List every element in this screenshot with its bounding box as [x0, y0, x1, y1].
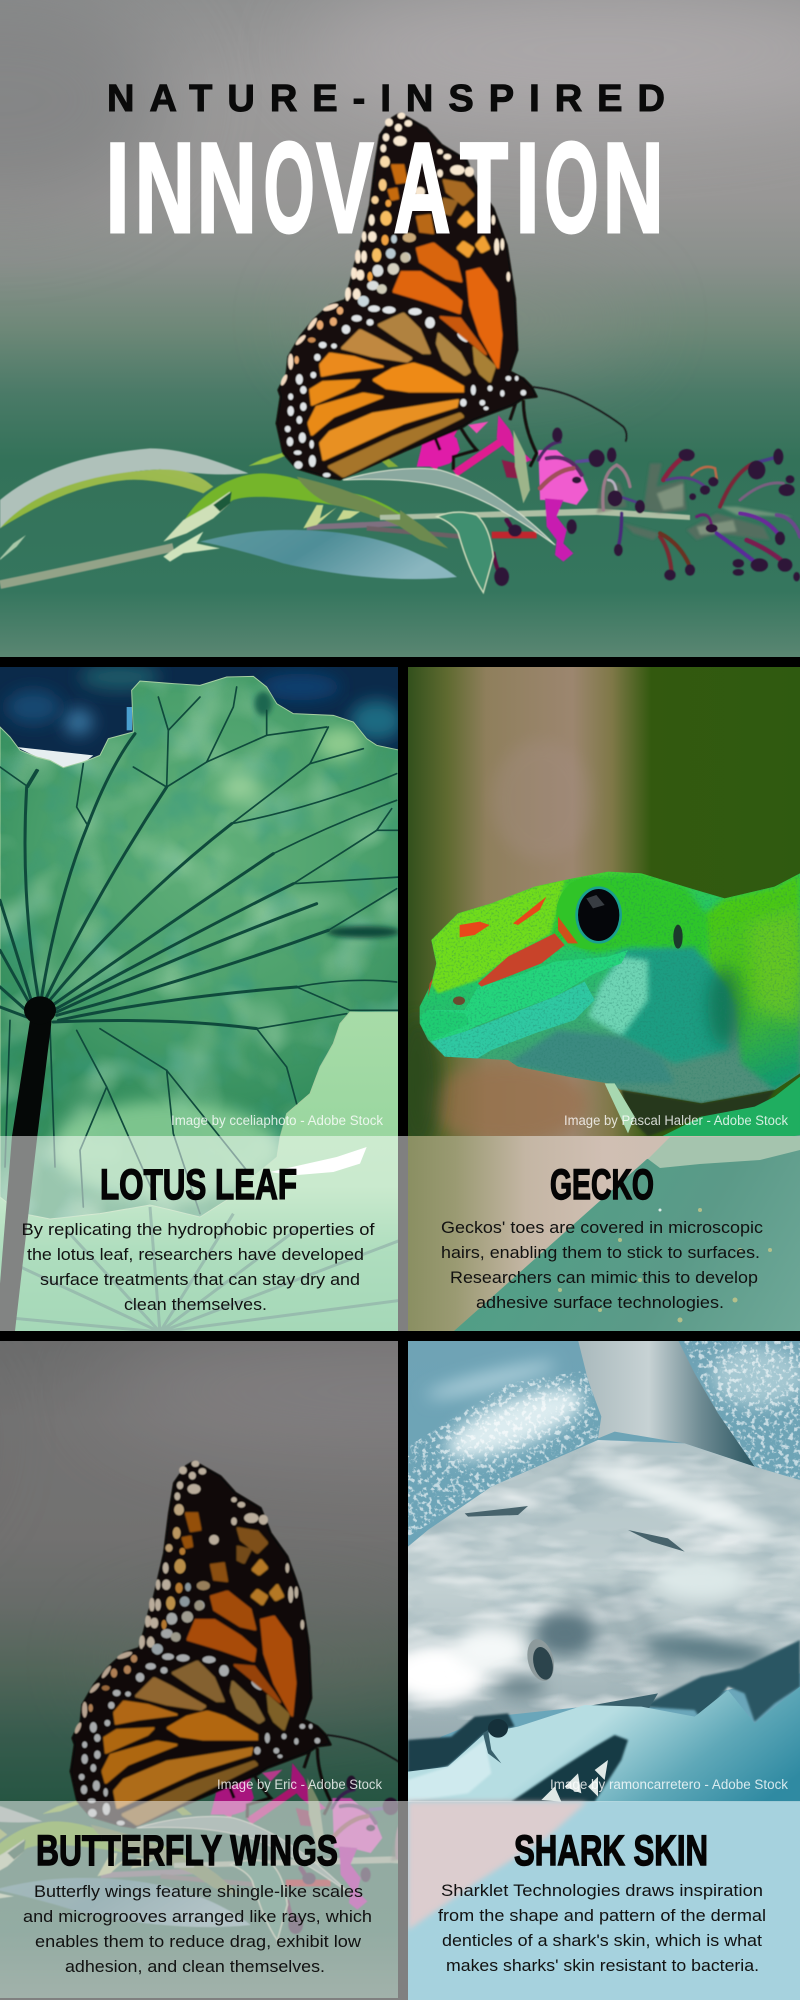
text: shark skin — [438, 1881, 766, 1975]
text: shark skin: Sharklet Technologies draws inspiration — [441, 1881, 763, 1900]
shark mouth — [511, 1735, 628, 1802]
text: gecko: adhesive surface technologies. — [476, 1293, 724, 1312]
caption band: butterfly and shark — [0, 1801, 800, 2000]
gecko body — [420, 872, 800, 1103]
title: letters A and T in front of butterfly: T — [460, 117, 508, 260]
text: butterfly wings: and microgrooves arranged like rays, which — [23, 1907, 372, 1926]
plant: leaves and stems — [0, 448, 457, 585]
text: shark skin: makes sharks' skin resistant to bacteria. — [446, 1956, 759, 1975]
text: butterfly wings — [23, 1882, 372, 1976]
gecko background — [408, 667, 800, 1136]
heading: shark skin: SHARK SKIN — [514, 1827, 708, 1875]
title: INNOVATION (V sits behind the butterfly): O — [544, 117, 598, 260]
dorsal fin — [578, 1340, 755, 1467]
text: butterfly wings: Butterfly wings feature shingle-like scales — [34, 1882, 363, 1901]
gecko front leg — [662, 1076, 800, 1136]
body light and shade — [388, 1433, 800, 1720]
gecko toes — [648, 1136, 800, 1168]
shark eye — [523, 1636, 558, 1684]
leaf surface — [454, 1135, 800, 1331]
hindwing spots — [285, 249, 526, 477]
credit: lotus: Image by cceliaphoto - Adobe Stock — [171, 1113, 383, 1128]
water foam — [438, 1374, 591, 1472]
panel: butterfly wings photo — [0, 1321, 694, 2000]
title: INNOVATION (V sits behind the butterfly): N — [197, 117, 257, 260]
title: INNOVATION (V sits behind the butterfly): A — [394, 117, 450, 260]
shark photo — [388, 1340, 800, 2000]
upper lip — [420, 950, 628, 1042]
title: INNOVATION (V sits behind the butterfly): O — [264, 117, 315, 260]
panel: shark — [388, 1340, 800, 2000]
hindwing margin highlights — [279, 250, 381, 386]
title: NATURE-INSPIRED: NATURE-INSPIRED — [107, 78, 665, 120]
title: INNOVATION (V sits behind the butterfly): V — [316, 117, 374, 260]
text: butterfly wings: enables them to reduce drag, exhibit low — [35, 1932, 362, 1951]
lower lip — [431, 982, 595, 1060]
text: gecko — [441, 1218, 764, 1312]
caption band: lotus and gap — [0, 1136, 408, 1331]
forewing cells and spots — [345, 112, 510, 368]
title: letters A and T in front of butterfly: A — [394, 117, 450, 260]
leaf mottling — [0, 667, 400, 1234]
title: INNOVATION (V sits behind the butterfly): I — [516, 117, 540, 260]
text: shark skin: from the shape and pattern of the dermal — [438, 1906, 766, 1925]
title: INNOVATION (V sits behind the butterfly): I — [106, 117, 130, 260]
face scales — [551, 873, 708, 960]
neck shadow — [621, 1090, 775, 1137]
title: INNOVATION (V sits behind the butterfly): N — [135, 117, 195, 260]
lotus leaf blade — [0, 676, 400, 1219]
leaf sparkles — [558, 1208, 772, 1322]
calyx tubes — [597, 463, 770, 540]
panel: gecko — [395, 667, 800, 1331]
eye — [556, 877, 623, 949]
plant: flower spike — [343, 387, 800, 593]
text: lotus leaf: the lotus leaf, researchers have developed — [27, 1245, 364, 1264]
gecko photo — [409, 747, 800, 1136]
text: shark skin: denticles of a shark's skin, which is what — [442, 1931, 762, 1950]
shark underside — [408, 1687, 800, 2000]
panel: hero blurred background — [0, 0, 800, 657]
title: INNOVATION (V sits behind the butterfly): T — [460, 117, 508, 260]
text: lotus leaf: clean themselves. — [124, 1295, 267, 1314]
lower background leaf — [0, 1007, 400, 1334]
body scars — [465, 1506, 685, 1552]
shark back — [408, 1440, 800, 1770]
shark lower jaw — [408, 1802, 800, 2000]
heading: gecko: GECKO — [550, 1161, 654, 1209]
credit: shark: Image by ramoncarretero - Adobe Stock — [550, 1777, 788, 1792]
text: gecko: hairs, enabling them to stick to surfaces. — [441, 1243, 760, 1262]
text: gecko: Geckos' toes are covered in microscopic — [441, 1218, 764, 1237]
title: INNOVATION (V sits behind the butterfly): N — [603, 117, 664, 260]
credit: butterfly: Image by Eric - Adobe Stock — [217, 1777, 382, 1792]
text: butterfly wings: adhesion, and clean themselves. — [65, 1957, 325, 1976]
text: lotus leaf — [22, 1220, 375, 1314]
leaf veins — [0, 687, 400, 1214]
butterfly body and wings — [277, 112, 537, 479]
gecko caption background — [408, 1136, 800, 1331]
heading: lotus leaf: LOTUS LEAF — [100, 1161, 297, 1209]
panel: lotus leaf — [0, 664, 403, 1334]
ear — [673, 925, 683, 949]
dark underside edge — [641, 1640, 800, 1722]
heading: butterfly wings: BUTTERFLY WINGS — [36, 1827, 338, 1875]
lotus stem — [0, 1020, 52, 1331]
text: gecko: Researchers can mimic this to develop — [450, 1268, 758, 1287]
text: lotus leaf: surface treatments that can stay dry and — [40, 1270, 360, 1289]
illustration: monarch butterfly on flowering branch — [0, 112, 800, 593]
credit: gecko: Image by Pascal Halder - Adobe Stock — [564, 1113, 788, 1128]
lotus photo — [0, 664, 403, 1334]
hindwing cells — [308, 313, 495, 477]
forehead — [431, 880, 565, 993]
text: lotus leaf: By replicating the hydrophobic properties of — [22, 1220, 375, 1239]
shark gums — [408, 1802, 587, 1930]
red stripe — [478, 933, 565, 987]
